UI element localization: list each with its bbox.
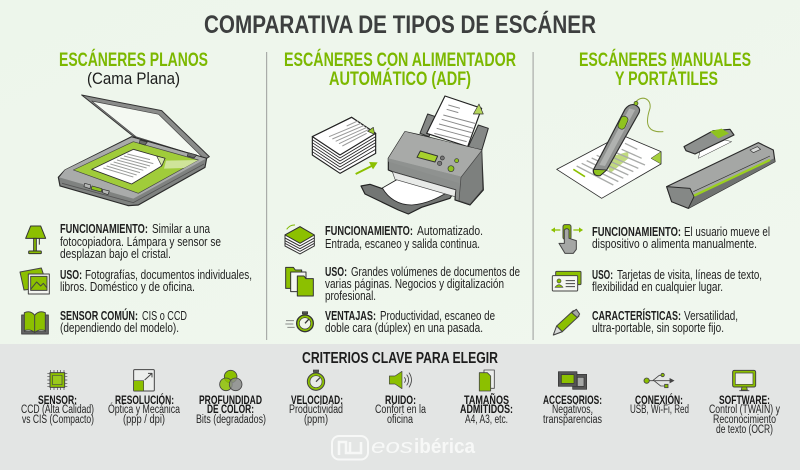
criterion: connection: CONEXIÓN:: [635, 394, 683, 407]
icon: stack feed: [285, 225, 314, 254]
text: handheld function: [592, 225, 770, 251]
heading: ADF: AUTOMÁTICO (ADF): [329, 68, 471, 90]
panel: flatbed scanners: [20, 49, 252, 335]
heading: handheld: [579, 49, 751, 90]
text: flatbed use: Fotografías, documentos individuales,: [85, 268, 252, 282]
text: handheld features: ultra-portable, sin soporte fijo.: [592, 321, 724, 335]
text: flatbed use: USO:: [60, 268, 82, 282]
criterion: sizes: ADMITIDOS:: [460, 404, 513, 416]
heading: flatbed: ESCÁNERES PLANOS: [59, 49, 208, 71]
criterion: color depth: [196, 370, 266, 426]
heading: flatbed: [59, 49, 208, 88]
arrow: feed: [356, 162, 378, 174]
criterion: software: SOFTWARE:: [719, 395, 770, 407]
criterion: speed: [289, 370, 343, 426]
criterion: speed: VELOCIDAD:: [291, 395, 343, 407]
icon: photos: [20, 268, 49, 294]
text: ADF use: Grandes volúmenes de documentos de: [351, 265, 520, 279]
text: ADF advantages: Productividad, escaneo de: [380, 309, 495, 323]
criterion: accessories: [543, 372, 602, 426]
icon: ID card: [552, 271, 581, 291]
criterion: accessories: ACCESORIOS:: [543, 395, 602, 407]
text: flatbed function: [60, 222, 221, 261]
text: ADF use: varias páginas. Negocios y digitalización: [325, 277, 504, 291]
heading: criteria: CRITERIOS CLAVE PARA ELEGIR: [302, 350, 498, 367]
text: handheld features: Versatilidad,: [684, 309, 738, 323]
criterion: sizes: A4, A3, etc.: [465, 414, 508, 426]
text: flatbed use: [60, 268, 252, 294]
criterion: connection: USB, Wi-Fi, Red: [630, 404, 689, 416]
text: handheld use: flexibilidad en cualquier lugar.: [592, 280, 723, 294]
icon: pen: [553, 309, 580, 335]
illustration: portable scanner: [667, 143, 775, 208]
text: flatbed sensor: (dependiendo del modelo).: [60, 321, 179, 335]
heading: ADF: [284, 49, 516, 90]
criterion: software: Reconocimiento: [713, 414, 776, 426]
icon: lamp: [26, 226, 46, 254]
criterion: speed: (ppm): [304, 414, 328, 426]
text: flatbed function: desplazan bajo el cristal.: [60, 247, 171, 261]
criterion: connection: [630, 373, 689, 416]
criterion: accessories: Negativos,: [552, 404, 593, 416]
text: flatbed sensor: CIS o CCD: [142, 309, 187, 323]
text: handheld use: USO:: [592, 268, 613, 282]
criterion: sensor: SENSOR:: [38, 395, 77, 407]
criterion: accessories: transparencias: [543, 414, 602, 426]
criterion: color depth: Bits (degradados): [196, 414, 266, 426]
text: handheld use: [592, 268, 762, 294]
criterion: sensor: [21, 370, 94, 426]
criterion: sensor: vs CIS (Compacto): [22, 414, 94, 426]
criterion: sizes: [460, 370, 513, 426]
title: COMPARATIVA DE TIPOS DE ESCÁNER: [204, 10, 596, 39]
logo: eos ibérica: eos: [371, 436, 413, 458]
text: flatbed function: fotocopiadora. Lámpara y sensor se: [60, 235, 221, 249]
icon: folders: [286, 267, 313, 296]
text: handheld features: CARACTERÍSTICAS:: [592, 308, 681, 323]
criterion: speed: Productividad: [289, 404, 343, 416]
icon: manual hand: [551, 225, 583, 253]
text: ADF advantages: doble cara (dúplex) en una pasada.: [325, 321, 483, 335]
heading: handheld: Y PORTÁTILES: [615, 68, 718, 90]
criterion: resolution: [108, 370, 180, 426]
text: ADF use: USO:: [325, 265, 347, 279]
text: flatbed sensor: SENSOR COMÚN:: [60, 308, 138, 323]
text: flatbed sensor: [60, 308, 187, 335]
criterion: sizes: TAMAÑOS: [464, 394, 509, 407]
panel: ADF scanners: [284, 49, 520, 335]
text: ADF use: [325, 265, 520, 303]
illustration: flatbed scanner: [58, 95, 209, 206]
text: handheld features: [592, 308, 738, 335]
criterion: software: Control (TWAIN) y: [709, 404, 780, 416]
heading: ADF: ESCÁNERES CON ALIMENTADOR: [284, 49, 516, 71]
text: ADF advantages: [325, 309, 495, 335]
criterion: resolution: Óptica y Mecánica: [108, 403, 180, 416]
criterion: noise: Confort en la: [375, 404, 426, 416]
illustration: mini scanner: [684, 129, 734, 158]
text: ADF function: Entrada, escaneo y salida continua.: [325, 237, 480, 251]
criterion: software: de texto (OCR): [716, 424, 773, 436]
criterion: noise: oficina: [387, 414, 413, 426]
text: ADF advantages: VENTAJAS:: [325, 309, 376, 323]
text: ADF function: Automatizado.: [417, 224, 483, 238]
criterion: resolution: RESOLUCIÓN:: [115, 394, 174, 407]
illustration: pen scanner on paper: [557, 98, 663, 198]
text: handheld function: FUNCIONAMIENTO:: [592, 225, 681, 239]
text: flatbed function: Similar a una: [152, 222, 210, 236]
illustration: ADF scanner: [361, 96, 488, 214]
heading: flatbed: (Cama Plana): [87, 69, 180, 88]
panel: handheld scanners: [551, 49, 775, 335]
text: ADF use: profesional.: [325, 289, 376, 303]
criterion: noise: [375, 371, 426, 426]
text: handheld function: dispositivo o alimenta manualmente.: [592, 237, 757, 251]
criterion: software: [709, 370, 780, 436]
text: handheld function: El usuario mueve el: [684, 225, 770, 239]
text: ADF function: [325, 224, 483, 251]
icon: book: [22, 312, 48, 334]
criterion: resolution: (ppp / dpi): [123, 414, 165, 426]
criterion: noise: RUIDO:: [385, 395, 416, 407]
text: handheld use: Tarjetas de visita, líneas de texto,: [617, 268, 762, 282]
criterion: color depth: PROFUNDIDAD: [199, 395, 262, 407]
logo: eos ibérica: [332, 436, 476, 460]
panel: key criteria: [0, 344, 800, 470]
logo: eos ibérica: ibérica: [414, 436, 476, 458]
text: flatbed function: FUNCIONAMIENTO:: [60, 222, 148, 236]
icon: stopwatch: [285, 312, 313, 332]
text: flatbed use: libros. Doméstico y de oficina.: [60, 280, 195, 294]
text: ADF function: FUNCIONAMIENTO:: [325, 224, 413, 238]
illustration: paper stack: [312, 117, 376, 173]
criterion: color depth: DE COLOR:: [207, 404, 254, 416]
criterion: sensor: CCD (Alta Calidad): [21, 404, 94, 416]
